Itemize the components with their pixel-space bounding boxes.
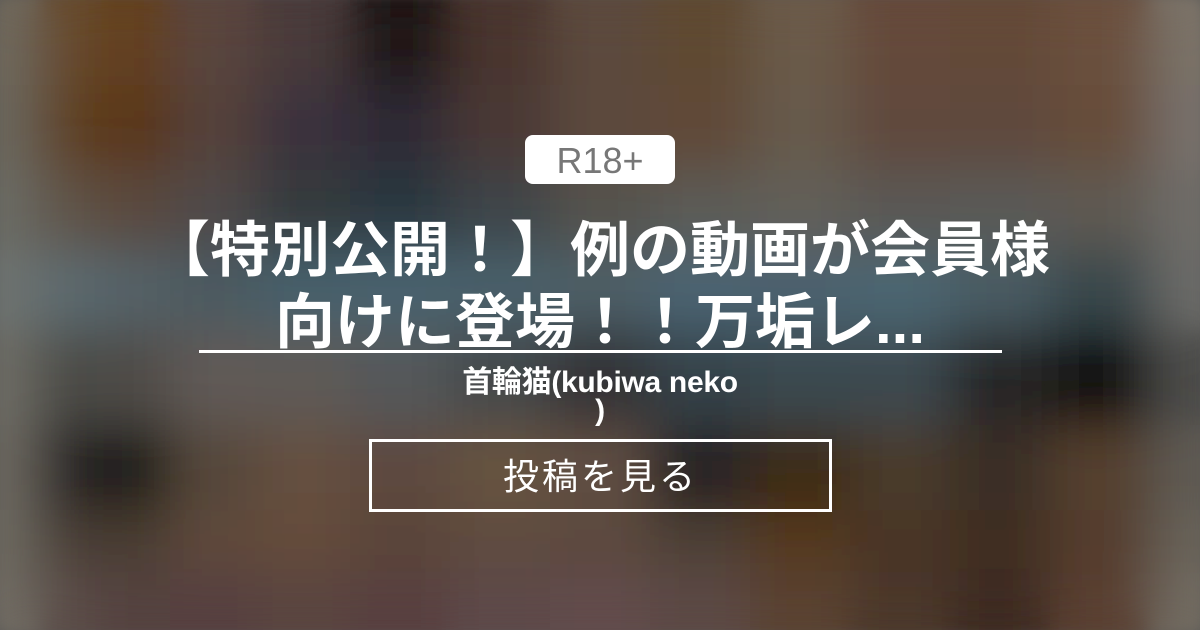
- view posts button: [369, 439, 832, 512]
- R18+ badge: R18+: [556, 140, 644, 181]
- author name: [462, 366, 738, 427]
- divider under title: [199, 350, 1002, 353]
- author name: ): [595, 394, 605, 427]
- author name: 首輪猫(kubiwa neko: [462, 366, 738, 399]
- title: 【特別公開！】例の動画が会員様: [150, 217, 1050, 284]
- title: 向けに登場！！万垢レ...: [275, 289, 925, 356]
- title: [150, 217, 1050, 356]
- view posts button: 投稿を見る: [503, 456, 698, 497]
- R18+ badge: [525, 135, 675, 184]
